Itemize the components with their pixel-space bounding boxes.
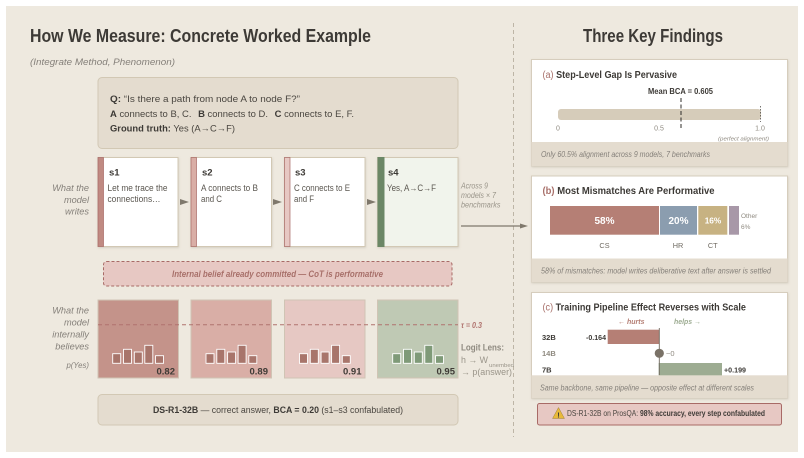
category labels xyxy=(599,241,718,250)
alert text: DS-R1-32B on ProsQA: 98% accuracy, every step confabulated xyxy=(567,409,765,418)
step card s3: and F xyxy=(294,194,315,204)
note: across models and benchmarks: benchmarks xyxy=(461,200,501,210)
callout: internal belief committed: Internal belief already committed — CoT is performative xyxy=(172,269,383,279)
arrow s3 to s4 xyxy=(367,199,376,205)
divider xyxy=(512,23,514,437)
step card s1: Let me trace the xyxy=(108,183,168,193)
other label: 6% xyxy=(741,224,751,231)
axis labels xyxy=(556,125,765,132)
result summary box xyxy=(98,394,458,425)
diverging bars xyxy=(608,328,722,376)
alert callout xyxy=(538,404,782,425)
row label: what the model writes: writes xyxy=(65,206,89,216)
stacked bar: 16% xyxy=(705,216,722,226)
BCA label: Mean BCA = 0.605 xyxy=(648,87,714,96)
belief panel s2: 0.89 xyxy=(191,300,272,378)
panel (b): mismatches xyxy=(532,176,788,282)
panel (c): training pipeline xyxy=(532,292,788,398)
category labels: HR xyxy=(673,241,683,250)
row 7B: 7B xyxy=(542,366,552,375)
row 32B: 32B xyxy=(542,333,556,342)
arrow to findings xyxy=(461,224,528,228)
panel (b) heading: (b) Most Mismatches Are Performative xyxy=(542,186,715,197)
callout: internal belief committed xyxy=(104,262,452,286)
note: across models and benchmarks: models × 7 xyxy=(461,191,497,200)
threshold line xyxy=(98,324,458,326)
belief panel s3: 0.91 xyxy=(284,300,365,378)
step card s4: s4 xyxy=(388,168,399,178)
belief panel s4: 0.95: 0.95 xyxy=(436,366,456,378)
row label: what the model internally believes xyxy=(52,306,90,370)
arrow s1 to s2 xyxy=(180,199,189,205)
row label: what the model internally believes: believes xyxy=(55,342,89,352)
stacked bar xyxy=(550,206,739,235)
row 7B: +0.199 xyxy=(724,366,746,375)
threshold label: τ = 0.3 xyxy=(461,321,483,330)
icon: warning triangle: ! xyxy=(557,410,560,419)
result summary box: DS-R1-32B — correct answer, BCA = 0.20 (s1–s3 confabulated) xyxy=(153,404,403,415)
other label xyxy=(741,213,758,231)
panel: question box xyxy=(98,78,458,148)
step card s3: s3 xyxy=(295,168,306,178)
hurts label: ← hurts xyxy=(618,317,644,326)
row 14B: ~0 xyxy=(666,349,675,358)
belief panel s3: 0.91: 0.91 xyxy=(343,366,362,378)
step card s4: Yes, A→C→F xyxy=(387,183,437,193)
axis labels: 1.0 xyxy=(755,125,765,132)
panel (b) caption: 58% of mismatches: model writes deliberative text after answer is settled xyxy=(541,266,772,275)
axis labels: 0 xyxy=(556,125,560,132)
row label: what the model internally believes: internally xyxy=(52,330,90,340)
step card s1 xyxy=(98,158,178,246)
row label: what the model internally believes: model xyxy=(64,318,90,328)
row 7B xyxy=(542,366,746,375)
logit lens note: → p(answer) xyxy=(461,367,512,377)
question text: Q: “Is there a path from node A to node F?” xyxy=(110,94,300,105)
row label: what the model writes: What the xyxy=(52,183,89,193)
category labels: CS xyxy=(599,241,610,250)
other label: Other xyxy=(741,213,758,220)
row label: what the model writes xyxy=(52,183,90,216)
belief panel s1: 0.82: 0.82 xyxy=(156,366,175,378)
perfect alignment note: (perfect alignment) xyxy=(718,137,769,143)
step card s2: s2 xyxy=(202,168,213,178)
note: across models and benchmarks xyxy=(460,182,501,210)
icon: warning triangle xyxy=(552,408,564,419)
panel (a): step-level gap xyxy=(532,60,788,166)
step card s2: and C xyxy=(201,194,223,204)
title: how we measure: How We Measure: Concrete Worked Example xyxy=(30,26,371,46)
panel (c) heading: (c) Training Pipeline Effect Reverses with Scale xyxy=(542,302,746,314)
row 14B: 14B xyxy=(542,349,556,358)
logit lens note: h → W xyxy=(461,355,488,365)
row 32B xyxy=(542,333,607,342)
panel (a) heading: (a) Step-Level Gap Is Pervasive xyxy=(542,70,678,81)
belief panel s4: 0.95 xyxy=(378,300,458,378)
panel (a) caption: Only 60.5% alignment across 9 models, 7 benchmarks xyxy=(541,150,710,159)
step card s3 xyxy=(284,158,365,246)
helps label: helps → xyxy=(674,317,701,326)
row label: what the model internally believes: What the xyxy=(52,306,89,316)
row label: what the model internally believes: p(Yes) xyxy=(65,361,89,370)
heading: three key findings: Three Key Findings xyxy=(583,26,723,46)
stacked bar: 20% xyxy=(668,216,689,227)
logit lens note xyxy=(461,342,514,377)
BCA scale bar xyxy=(558,109,761,120)
logit lens note: unembed xyxy=(489,363,514,369)
row 32B: -0.164 xyxy=(586,333,607,342)
arrow s2 to s3 xyxy=(273,199,282,205)
subtitle: (Integrate Method, Phenomenon) xyxy=(30,57,175,67)
belief panel s2: 0.89: 0.89 xyxy=(250,366,268,378)
step card s3: C connects to E xyxy=(294,183,350,193)
step card s1: connections… xyxy=(108,194,160,204)
ground truth text: Ground truth: Yes (A→C→F) xyxy=(110,124,235,134)
step card s1: s1 xyxy=(109,168,120,178)
step card s2 xyxy=(191,158,272,246)
row label: what the model writes: model xyxy=(64,195,90,205)
stacked bar: 58% xyxy=(594,216,615,227)
step card s4 xyxy=(378,157,458,247)
note: across models and benchmarks: Across 9 xyxy=(460,182,489,190)
connections text: A connects to B, C. B connects to D. C connects to E, F. xyxy=(110,109,354,120)
step card s2: A connects to B xyxy=(201,183,258,193)
belief panel s1: 0.82 xyxy=(98,300,178,378)
axis labels: 0.5 xyxy=(654,125,664,132)
row 14B xyxy=(542,349,675,358)
panel (c) caption xyxy=(532,375,788,398)
category labels: CT xyxy=(708,241,718,250)
panel (c): training pipeline: Same backbone, same pipeline — opposite effect at different scales xyxy=(540,383,754,392)
logit lens note: Logit Lens: xyxy=(461,342,504,352)
